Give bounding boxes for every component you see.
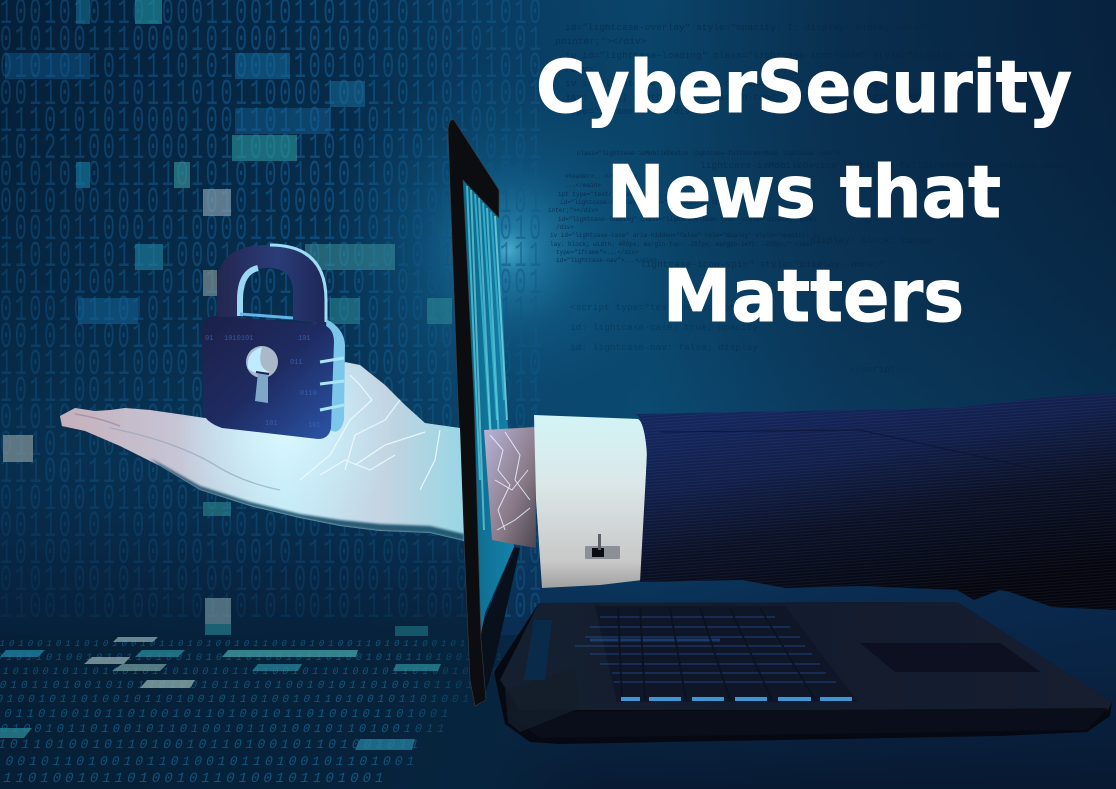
binary floor: 1010010110101001011010100101100101010011010110010101 <box>0 638 489 649</box>
wall fade <box>0 470 470 635</box>
code text behind title: <script type="text/javascript"> <box>570 302 747 313</box>
lock binary digits: 0110 <box>300 390 317 398</box>
code text behind title: ipt type="text/javascript">...</script> <box>558 191 699 198</box>
lock binary digits: 011 <box>290 359 303 367</box>
binary code wall: 0010100101011101011000010010100101101 <box>0 182 544 223</box>
hand <box>60 362 464 541</box>
hand with padlock <box>60 245 464 541</box>
laptop base <box>494 602 1112 744</box>
floor highlight blocks <box>0 626 441 750</box>
binary code wall: 1101011011110001010110100101011010111 <box>0 236 544 277</box>
code text behind title: iv id="lightcase-loading" class="lightcase-icon-spin" style="display: none;" <box>565 50 998 61</box>
lock binary digits: 101 <box>308 422 321 430</box>
binary code wall: 1011010011101011000101010110100101001 <box>0 263 544 304</box>
lock side plate <box>326 319 345 432</box>
binary code wall: 1110011100011001010101001101011110010 <box>0 452 544 493</box>
binary code wall: 0101001110000101000110101010100101101 <box>0 20 544 61</box>
code text behind title: id="lightcase-nav">...</div> <box>556 257 657 264</box>
laptop bezel <box>448 120 499 706</box>
code text behind title: iv id="lightcase-case" aria-hidden="false" role="dialog" <box>565 78 884 89</box>
binary code wall: 1101100110000110100011111000101101010 <box>0 344 544 385</box>
keyhole <box>246 346 278 403</box>
lock binary digits: 1010101 <box>224 335 253 343</box>
wrist with lightning <box>484 427 536 548</box>
binary floor: 110100101101001011010010110100101101001011010010110 <box>0 667 503 678</box>
binary code wall: 1001011000101000011011101010011011010 <box>0 209 544 250</box>
code text behind title: type="iframe">...</div> <box>565 106 696 117</box>
code text behind title: lightcase-isMobileDevice lightcase-fullScreenMode lightcase-open <box>700 160 1065 171</box>
binary code wall: 0101011001001011110101000101010110101 <box>0 398 544 439</box>
code text behind title: lay: block; width: 400px; margin-top: -257px; margin-left: -200px; <box>565 92 941 103</box>
binary code wall: 1011100110111000101101010101110100011 <box>0 371 544 412</box>
code text behind title: /div> <box>565 64 594 75</box>
binary floor <box>0 635 640 789</box>
laptop <box>448 120 1112 744</box>
binary code wall: 1100101010011011010100101110100101100 <box>0 587 544 628</box>
title: CyberSecurity <box>536 45 1072 129</box>
binary code wall: 0101001011000101110011010001110100101 <box>0 479 544 520</box>
touchpad <box>860 643 1041 672</box>
title <box>536 45 1072 338</box>
binary code wall: 0110110010111010100011110100101010001 <box>0 425 544 466</box>
lightning veins <box>300 375 440 490</box>
code text behind title: display: block; cursor: <box>810 235 941 246</box>
binary code wall: 0101100101110100101100100010101001101 <box>0 560 544 601</box>
keyboard <box>575 606 858 702</box>
cufflink <box>585 534 620 559</box>
arm <box>484 393 1116 610</box>
shackle <box>217 245 326 324</box>
code text behind title: lay: block; width: 400px; margin-top: -257px; margin-left: -200px;" class <box>550 241 813 248</box>
code text behind title: </script> <box>850 364 902 375</box>
binary code wall: 0011010110100110010100111010010101110 <box>0 506 544 547</box>
code text behind title: inter;"></div> <box>548 207 599 214</box>
title: Matters <box>663 254 964 338</box>
lock binary digits <box>205 335 321 430</box>
laptop lid back and hinge <box>476 547 520 705</box>
code text behind title: class="lightcase-isMobileDevice lightcase-fullScreenMode lightcase-open"> <box>577 150 840 157</box>
title: News that <box>607 150 1001 234</box>
binary code wall: 1012110011000101100011010101011110101 <box>0 128 544 169</box>
binary code wall <box>0 0 544 628</box>
binary floor: 0010110100101011010010110101001010110100101101 <box>0 680 478 692</box>
binary code wall: 0010101001011101110010111010100110011 <box>0 317 544 358</box>
shirt cuff <box>534 415 647 588</box>
code text behind title: ...</main> <box>565 182 601 189</box>
code text behind title: pointer;"></div> <box>555 36 647 47</box>
lock binary digits: 01 <box>205 335 213 343</box>
code text behind title: lightcase-icon-spin" style="display: none;" <box>640 259 885 270</box>
laptop screen <box>463 180 514 640</box>
code text behind title <box>548 22 1065 375</box>
binary code wall: 1110101010000100110110111011100100111 <box>0 101 544 142</box>
lock binary digits: 101 <box>298 335 311 343</box>
binary code wall: 1010011101010011001011100100111010010 <box>0 533 544 574</box>
lock body <box>202 316 334 439</box>
code text behind title: type="iframe">...</div> <box>556 249 639 256</box>
binary code wall: 0100101101011101101100101010011010111 <box>0 290 544 331</box>
lock teeth <box>320 358 344 410</box>
code text behind title: id="lightcase-loading" class="lightcase-icon-spin" style="display: none; <box>558 216 817 223</box>
binary code wall: 0011011010111010110000100110110101001 <box>0 74 544 115</box>
highlighted binary blocks <box>3 0 452 636</box>
padlock <box>202 245 345 439</box>
binary floor: 010110100101011010010101101001011010010101101001011 <box>0 653 507 664</box>
code text behind title: id="lightcase-overlay" style="opacity: 1; display: block; cursor: <box>565 22 936 33</box>
binary code wall: 0101010111110101010010101100110101011 <box>0 155 544 196</box>
code text behind title: id="lightcase-overlay" style="opacity: 1; display: block; <box>560 199 765 206</box>
code text behind title: id: lightcase-case: true; opacity <box>570 322 758 333</box>
code text behind title: <header>...</header> <box>565 173 637 180</box>
code text behind title: iv id="lightcase-case" aria-hidden="false" role="dialog" style="opacity: 1; <box>550 232 820 239</box>
lock binary digits: 101 <box>265 420 278 428</box>
code text behind title: id: lightcase-nav: false; display <box>570 342 758 353</box>
binary code wall: 0101011011110101000110010100100111010 <box>0 47 544 88</box>
suit sleeve <box>636 393 1116 610</box>
code text behind title: /div> <box>556 224 574 231</box>
